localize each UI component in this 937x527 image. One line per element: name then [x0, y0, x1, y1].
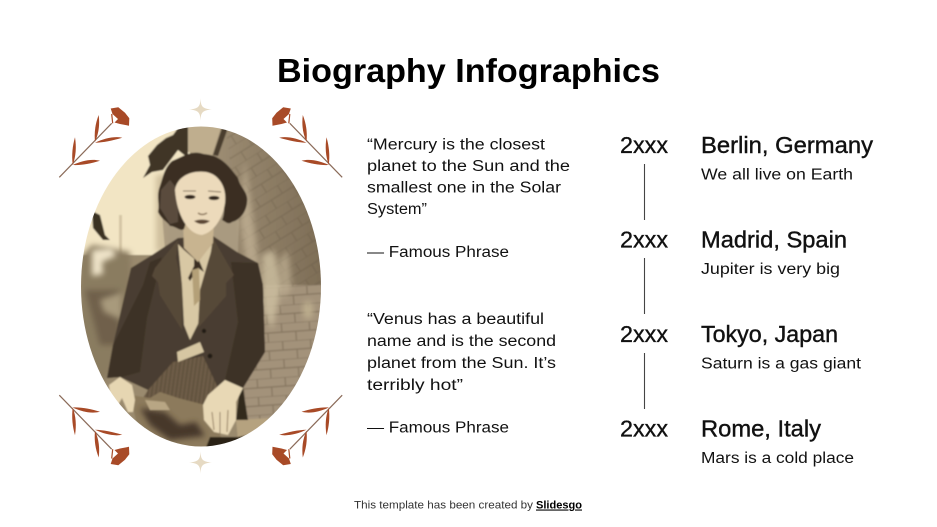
skirt [144, 356, 218, 404]
timeline entry: Madrid [620, 226, 847, 278]
timeline connector 2 [644, 258, 646, 314]
timeline entry: Tokyo: Tokyo, Japan [701, 321, 838, 347]
board [236, 418, 268, 438]
timeline entry: Rome: 2xxx [620, 416, 669, 442]
tie [188, 258, 204, 281]
jacket [107, 236, 265, 390]
quote 1: smallest one in the Solar [367, 180, 561, 196]
quote 1: “Mercury is the closest [367, 136, 546, 154]
title: Biography Infographics [277, 52, 660, 89]
left foliage [92, 211, 110, 240]
timeline entry: Berlin: We all live on Earth [701, 166, 853, 184]
lips [194, 220, 210, 224]
timeline entry: Rome: Rome, Italy [701, 416, 822, 442]
icon: sprig bottom right [272, 395, 342, 465]
timeline entry: Madrid: Jupiter is very big [701, 261, 840, 278]
icon: sprig bottom left [59, 395, 129, 465]
quote 2: — Famous Phrase [367, 420, 509, 436]
brick wall [162, 143, 321, 286]
dark foliage top [143, 126, 188, 178]
shirt [178, 242, 214, 340]
quote 1 [367, 136, 570, 261]
icon: sprig top right [272, 107, 342, 177]
neck [183, 222, 214, 262]
icon: sprig top left [59, 107, 129, 177]
timeline entry: Tokyo [620, 321, 862, 372]
sky [80, 125, 190, 255]
quote 1: — Famous Phrase [367, 244, 509, 261]
quote 2: planet from the Sun. It’s [367, 355, 556, 372]
light column [188, 125, 222, 156]
hair [158, 153, 247, 230]
quote 1: System” [367, 201, 427, 218]
timeline entry: Tokyo: 2xxx [620, 321, 669, 347]
quote 2: name and is the second [367, 333, 556, 350]
timeline entry: Madrid: 2xxx [620, 226, 669, 252]
portrait photo in oval frame [80, 125, 325, 452]
timeline entry: Berlin: Berlin, Germany [701, 132, 874, 158]
timeline entry: Madrid: Madrid, Spain [701, 226, 847, 252]
debris [134, 392, 220, 446]
footer credit: Slidesgo [536, 500, 582, 512]
lapels [152, 240, 182, 330]
buttons [202, 329, 206, 333]
quote 1: planet to the Sun and the [367, 158, 570, 175]
timeline entry: Rome [620, 416, 854, 467]
quote 2: “Venus has a beautiful [367, 311, 544, 328]
icon: sparkle top [189, 98, 212, 121]
timeline connector 3 [644, 353, 646, 409]
hands [109, 377, 135, 412]
footer credit: This template has been created by [354, 500, 534, 512]
nose [198, 213, 207, 214]
timeline entry: Tokyo: Saturn is a gas giant [701, 356, 862, 372]
quote 2: terribly hot” [367, 377, 463, 394]
timeline entry: Berlin: 2xxx [620, 132, 669, 158]
timeline entry: Berlin [620, 132, 874, 184]
quote 2 [367, 311, 556, 436]
eyes [184, 195, 196, 199]
icon: sparkle bottom [189, 451, 212, 474]
timeline connector 1 [644, 164, 646, 220]
face [175, 172, 225, 235]
timeline entry: Rome: Mars is a cold place [701, 450, 854, 467]
